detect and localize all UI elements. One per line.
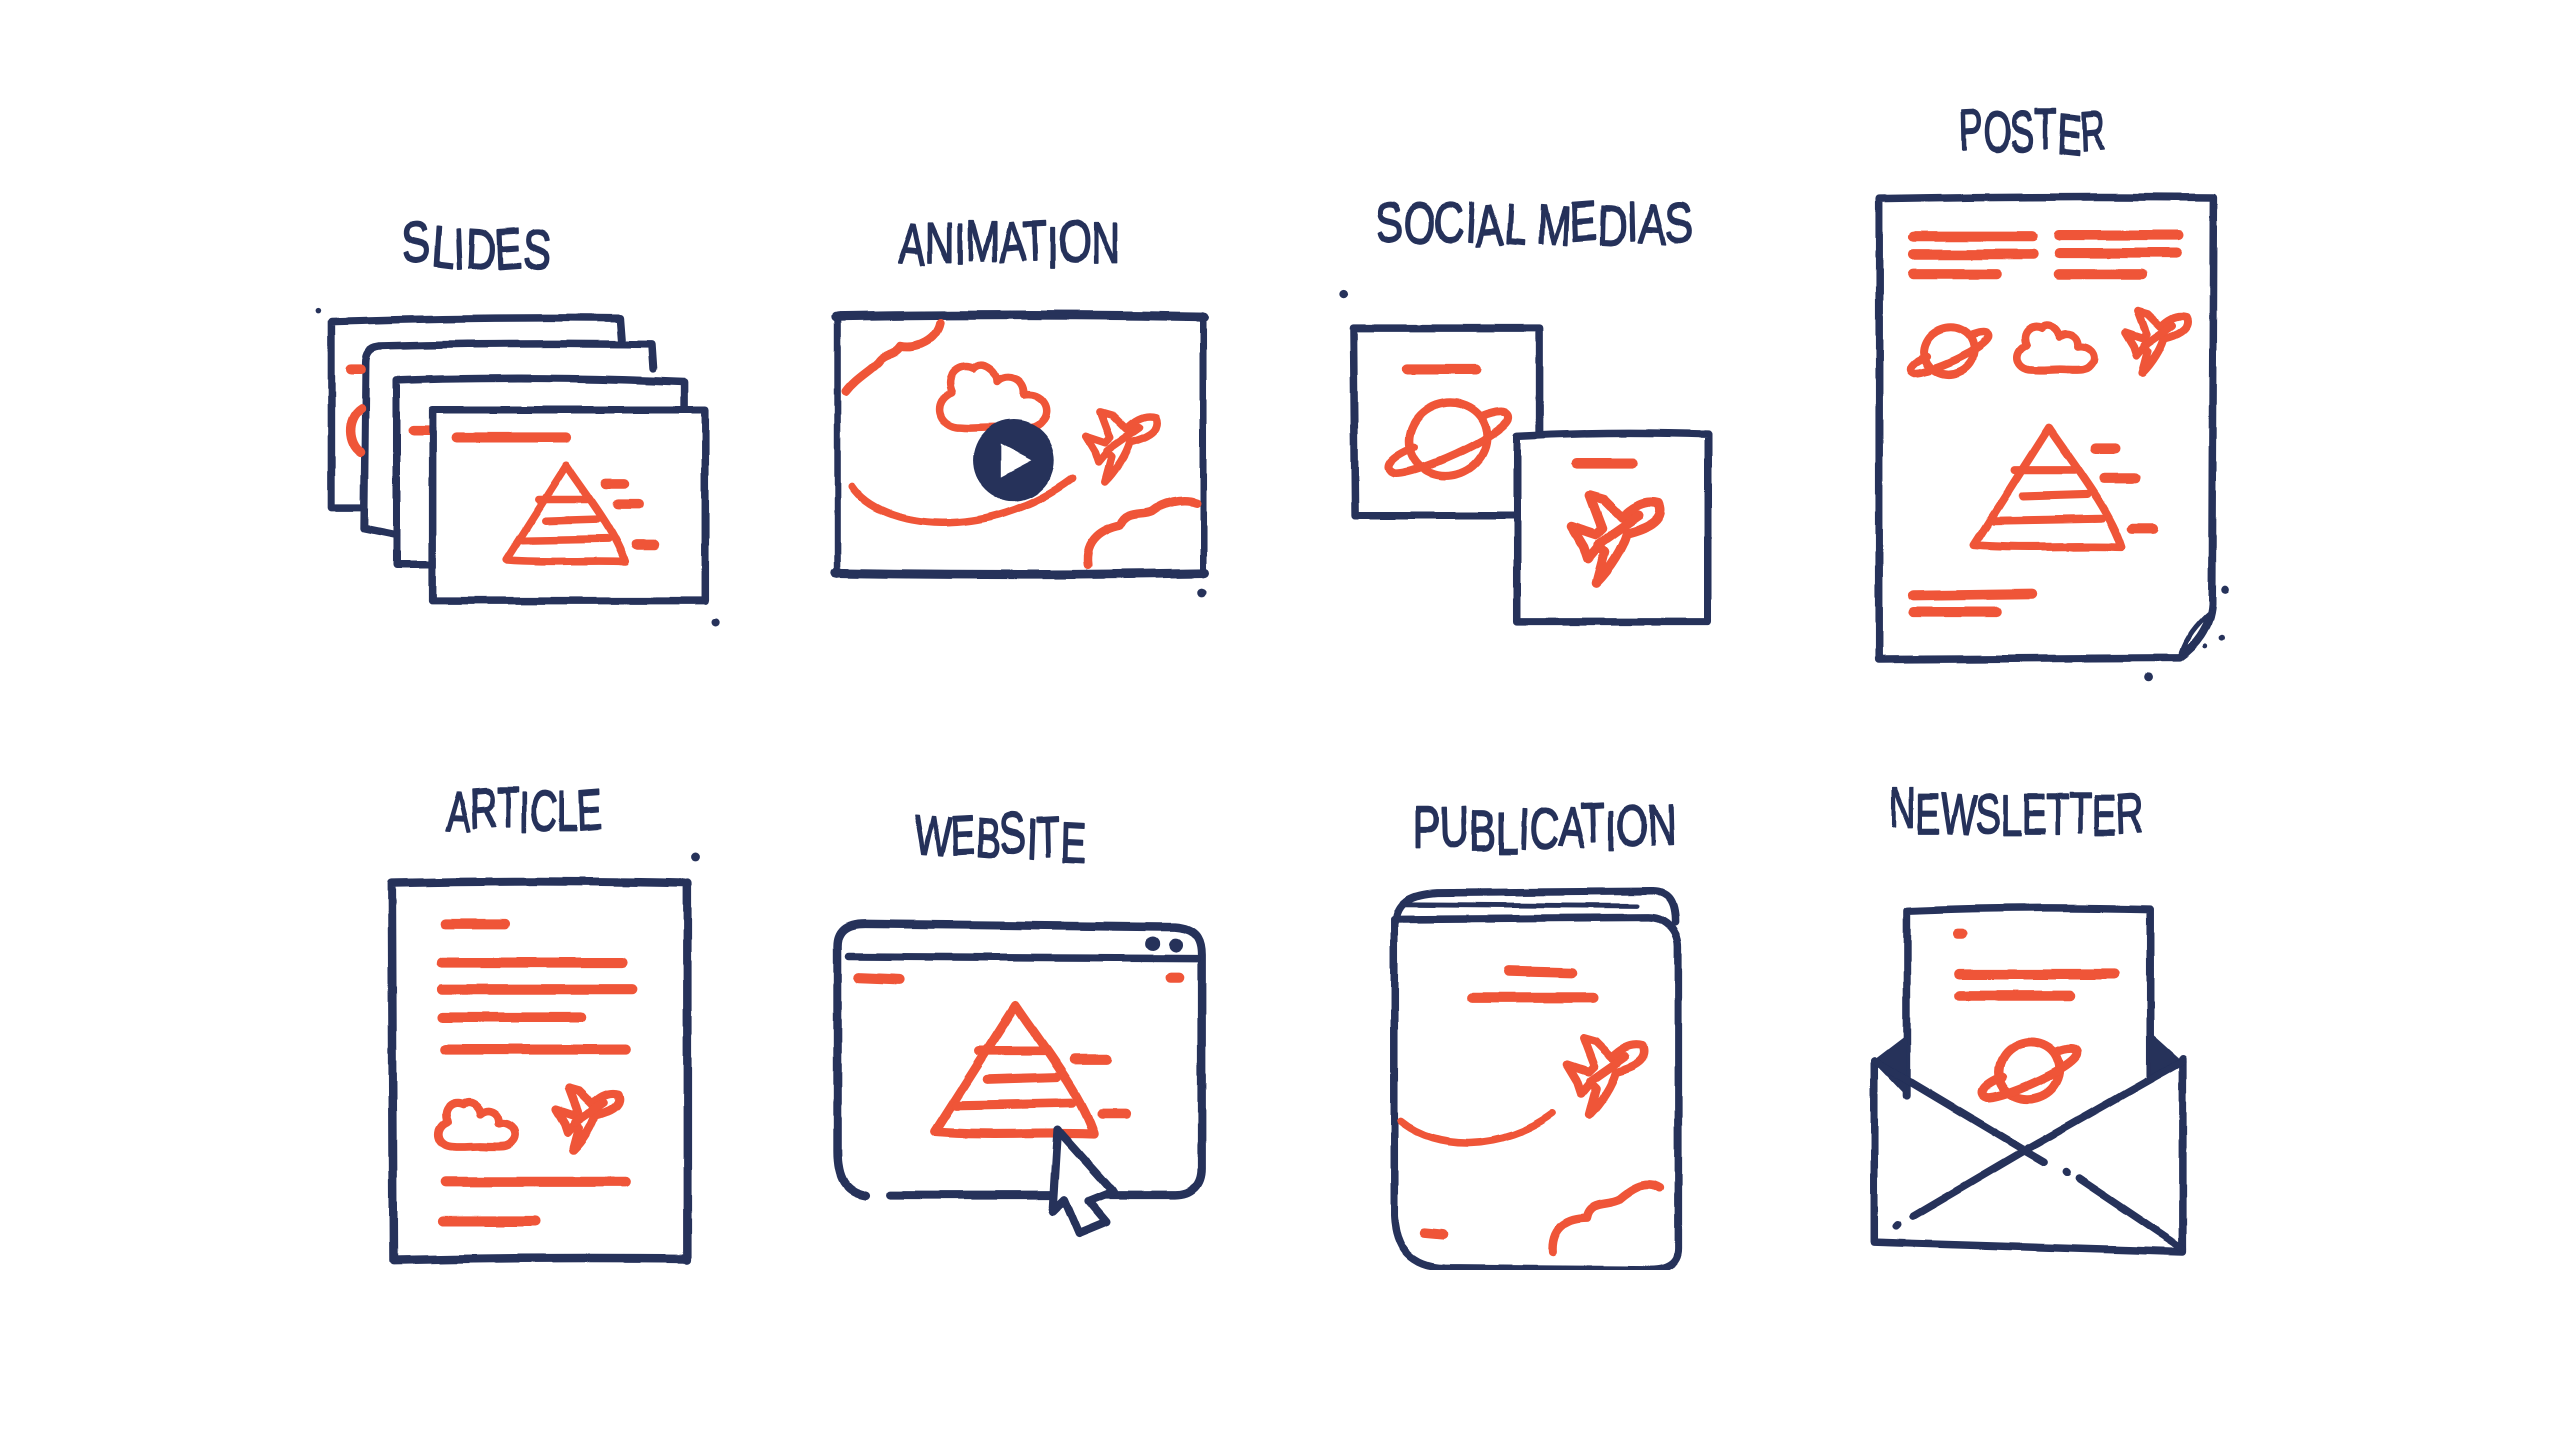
envelope body <box>1874 1058 2183 1252</box>
panel: social medias <box>1339 189 1708 622</box>
text lines <box>1913 235 2178 274</box>
heading: slides: SLIDES <box>400 210 554 283</box>
plane <box>1571 495 1661 583</box>
heading: article: ARTICLE <box>445 777 603 845</box>
pyramid chart <box>1974 428 2122 547</box>
heading: poster: POSTER <box>1957 98 2107 168</box>
cursor <box>1053 1130 1113 1234</box>
panel: website <box>838 801 1202 1234</box>
heading: publication: PUBLICATION <box>1414 790 1677 867</box>
cloud <box>940 365 1046 428</box>
book pages <box>1404 904 1638 906</box>
dots <box>2144 585 2229 682</box>
plane <box>1086 411 1157 482</box>
panel: newsletter <box>1873 777 2183 1252</box>
clipped marks on hidden slides <box>351 369 429 431</box>
clipped cloud on hidden slide <box>350 408 361 452</box>
video frame top and bottom <box>836 315 1205 575</box>
pyramid chart <box>506 465 625 562</box>
letter <box>1907 908 2150 1097</box>
post two title <box>1577 460 1633 467</box>
pyramid chart <box>935 1005 1094 1134</box>
cloud icon <box>2017 325 2094 370</box>
flight path <box>1401 1113 1553 1142</box>
envelope flap <box>1874 1061 2183 1249</box>
cloud strip top <box>846 323 940 392</box>
heading: website: WEBSITE <box>914 801 1087 876</box>
panel: slides <box>316 210 719 626</box>
address bar <box>849 957 1197 958</box>
heading: newsletter: NEWSLETTER <box>1889 777 2144 849</box>
video frame <box>838 315 1203 575</box>
panel: animation <box>836 209 1206 597</box>
planet icon <box>1910 320 1989 382</box>
front slide <box>433 410 705 601</box>
browser window <box>838 924 1202 1195</box>
mark <box>1425 1232 1443 1234</box>
panel: article <box>392 777 700 1260</box>
cloud strip bottom <box>1087 501 1197 565</box>
text lines <box>442 924 632 1050</box>
panel: poster <box>1879 98 2229 682</box>
flight path <box>852 478 1073 523</box>
page marks <box>859 978 1179 979</box>
pyramid labels <box>1074 1059 1127 1113</box>
book cover <box>1394 891 1678 1270</box>
pyramid labels <box>2095 449 2153 529</box>
second slide <box>364 344 653 535</box>
cloud strip <box>1553 1185 1660 1252</box>
plane icon <box>2125 311 2188 373</box>
dot <box>1197 588 1206 597</box>
window buttons <box>1146 936 1183 952</box>
cloud <box>439 1102 515 1147</box>
letter marks <box>1958 934 2114 996</box>
back slide <box>331 318 622 508</box>
bottom lines <box>1913 594 2033 612</box>
bottom lines <box>442 1182 625 1221</box>
post two <box>1517 433 1708 622</box>
planet <box>1388 392 1509 486</box>
play button <box>973 419 1055 501</box>
title lines <box>1473 971 1593 997</box>
dot <box>1339 289 1348 298</box>
corner curl <box>2181 612 2211 653</box>
title line <box>457 434 567 441</box>
dots <box>316 307 719 626</box>
heading: social medias: SOCIAL MEDIAS <box>1373 189 1694 259</box>
heading: animation: ANIMATION <box>897 209 1120 281</box>
plane <box>1568 1039 1645 1114</box>
envelope corners <box>1873 1032 2183 1097</box>
poster sheet <box>1879 197 2214 659</box>
panel: publication <box>1394 790 1678 1270</box>
planet <box>1982 1034 2077 1108</box>
pyramid labels <box>606 483 655 545</box>
plane <box>556 1088 619 1150</box>
article page <box>392 881 687 1260</box>
envelope gaps <box>1897 1172 2066 1226</box>
post one title <box>1407 366 1476 372</box>
third slide <box>397 378 684 565</box>
post one <box>1353 328 1540 516</box>
dot <box>691 853 700 861</box>
